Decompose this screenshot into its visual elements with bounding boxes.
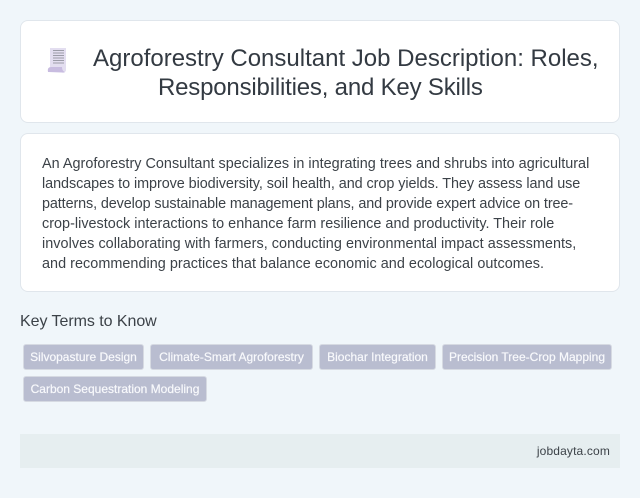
description text: involves collaborating with farmers, conducting environmental impact assessments, <box>42 236 576 252</box>
tag: precision: Precision Tree-Crop Mapping <box>449 350 605 364</box>
icon: document scroll <box>48 48 66 73</box>
tag: carbon: Carbon Sequestration Modeling <box>31 382 199 396</box>
description text: and recommending practices that balance economic and ecological outcomes. <box>42 256 544 272</box>
description text: crop-livestock interactions to enhance farm resilience and productivity. Their role <box>42 216 554 232</box>
tag: carbon <box>23 376 207 402</box>
tag list <box>23 344 612 402</box>
panel: description card <box>20 133 620 292</box>
tag: silvopasture: Silvopasture Design <box>30 350 137 364</box>
title line 1: Agroforestry Consultant Job Description: Roles, <box>93 45 599 72</box>
tag: silvopasture <box>23 344 144 370</box>
tag: biochar <box>319 344 436 370</box>
description text: patterns, develop sustainable management plans, and provide expert advice on tree- <box>42 196 573 212</box>
tag: biochar: Biochar Integration <box>327 350 428 364</box>
tag: precision <box>442 344 612 370</box>
tag: climate-smart: Climate-Smart Agroforestry <box>159 350 304 364</box>
description text: landscapes to improve biodiversity, soil health, and crop yields. They assess land use <box>42 176 580 192</box>
title line 2: Responsibilities, and Key Skills <box>158 74 483 101</box>
description text: An Agroforestry Consultant specializes in integrating trees and shrubs into agricultural <box>42 156 589 172</box>
description text <box>42 156 589 272</box>
panel: title card <box>20 20 620 123</box>
footer bar <box>20 434 620 468</box>
tag: climate-smart <box>150 344 313 370</box>
heading: key terms: Key Terms to Know <box>20 313 157 330</box>
footer source text: jobdayta.com <box>537 444 610 458</box>
